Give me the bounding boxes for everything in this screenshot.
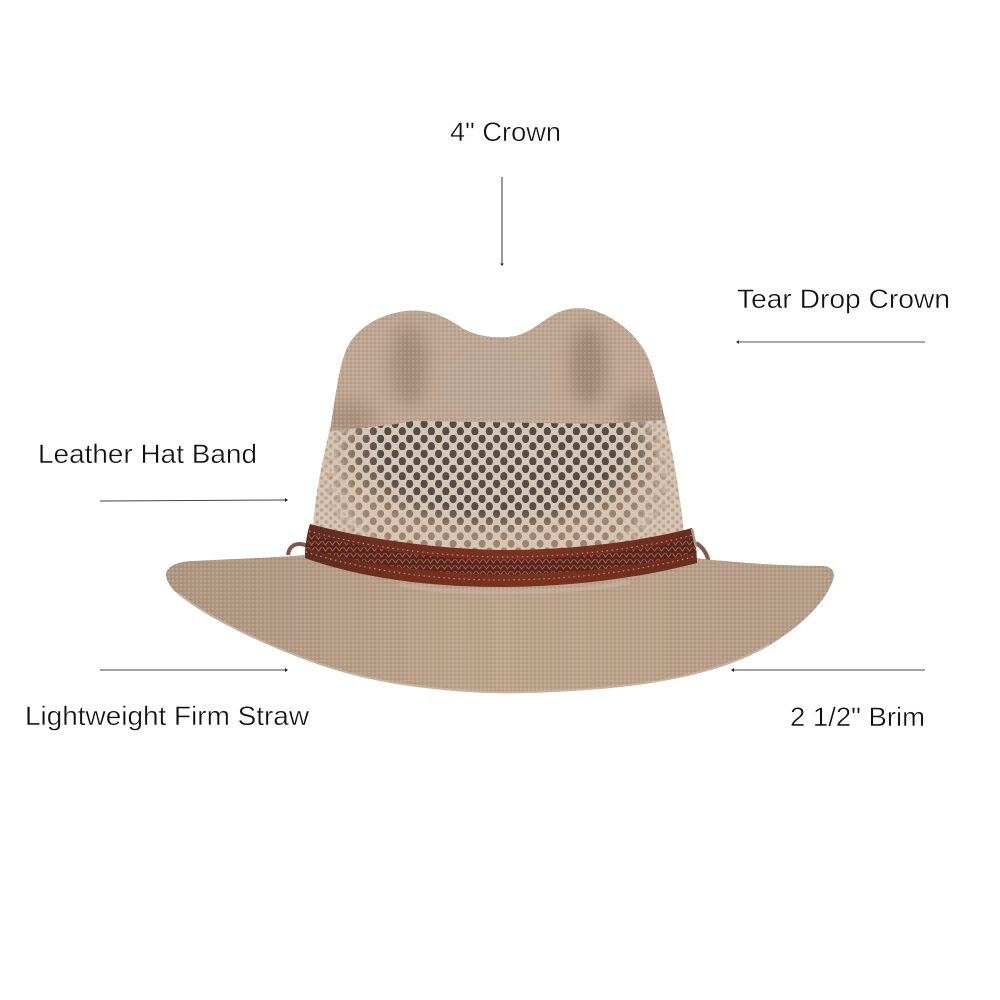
label: brim: 2 1/2" Brim bbox=[790, 702, 925, 732]
arrow: leather hat band bbox=[100, 498, 288, 502]
arrow: tear drop crown bbox=[736, 340, 925, 344]
label: lightweight firm straw: Lightweight Firm Straw bbox=[25, 701, 310, 731]
label: leather hat band: Leather Hat Band bbox=[38, 439, 257, 469]
hat crown solid upper bbox=[330, 308, 665, 431]
arrow: crown bbox=[500, 177, 504, 266]
label: tear drop crown: Tear Drop Crown bbox=[737, 284, 950, 314]
hat band back knots bbox=[288, 543, 709, 564]
hat illustration bbox=[160, 300, 840, 700]
arrow: brim bbox=[731, 668, 925, 672]
hat brim bbox=[160, 550, 840, 700]
crown ventilated mesh bbox=[313, 417, 684, 550]
label: 4 inch crown: 4" Crown bbox=[450, 117, 561, 147]
leather hat band bbox=[305, 524, 697, 587]
arrow: lightweight straw bbox=[100, 668, 288, 672]
